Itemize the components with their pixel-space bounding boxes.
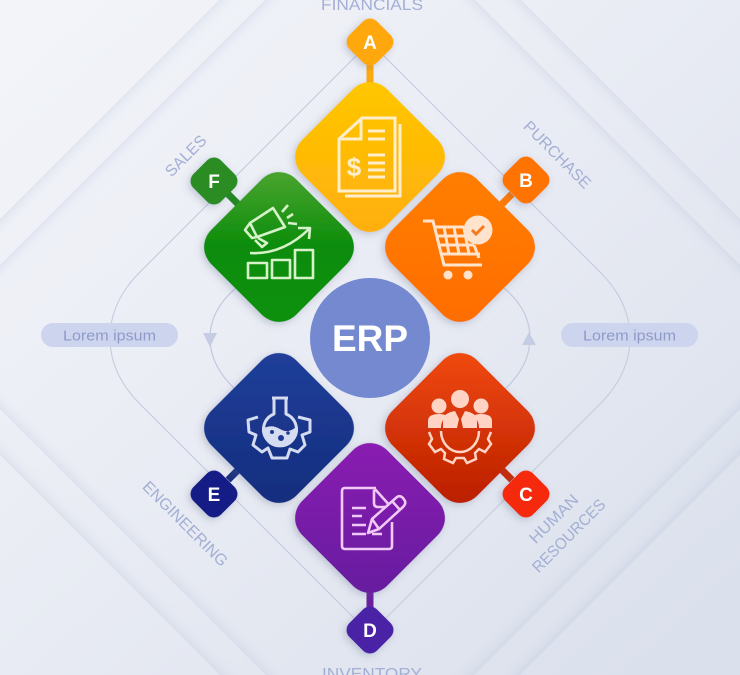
pill: left [41,323,178,347]
badge A [342,14,398,70]
panel: C human resources [375,343,545,513]
panel: B purchase [375,162,545,332]
icon: invoice: $ [347,152,362,182]
badge D: D [363,621,377,642]
inner cycle arrows [203,288,536,390]
pill: right: Lorem ipsum [583,328,676,344]
icon: cart [423,216,492,280]
panel: D inventory [285,433,455,603]
icon: document pencil [342,488,405,549]
label: human resources: HUMAN [526,491,582,547]
badge F: F [208,172,220,193]
pill: right [561,323,698,347]
badge E [186,466,242,522]
center ERP circle: ERP [332,318,408,359]
pill: left: Lorem ipsum [63,328,156,344]
icon: megaphone growth [245,205,313,278]
label: engineering: ENGINEERING [139,478,231,570]
center ERP circle [310,278,430,398]
connectors [228,60,512,612]
badge B: B [519,171,533,192]
icon: team gear [428,390,492,463]
connector outline [110,42,630,634]
panel: F sales [194,162,364,332]
panel: E engineering [194,343,364,513]
icon: flask gear [248,398,310,458]
badge E: E [208,485,220,506]
badge C: C [519,485,533,506]
icon: invoice [339,118,400,196]
panel: A financials [285,72,455,242]
badge B [498,152,554,208]
badge D [342,602,398,658]
label: human resources: RESOURCES [529,496,609,576]
label: sales: SALES [162,132,210,180]
badge A: A [363,33,377,54]
badge F [186,153,242,209]
label: purchase: PURCHASE [520,118,594,192]
badge C [498,466,554,522]
